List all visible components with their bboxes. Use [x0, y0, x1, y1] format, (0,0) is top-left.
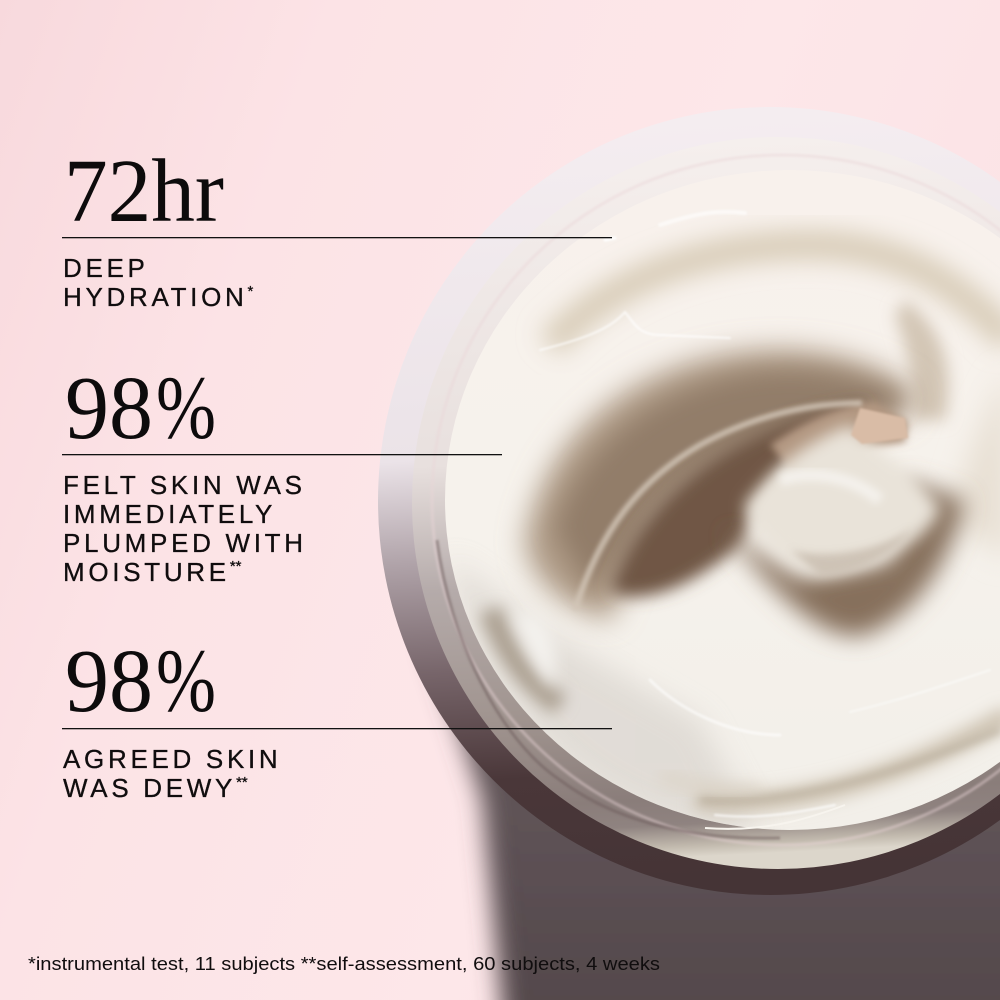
label: IMMEDIATELY	[63, 499, 276, 529]
lower brown pocket	[725, 480, 965, 636]
label: WAS DEWY	[63, 773, 236, 803]
cream edge highlight	[705, 805, 845, 829]
cream base	[445, 170, 1000, 830]
number: %	[156, 632, 216, 731]
lower beige folds	[695, 715, 1000, 802]
number	[65, 632, 216, 731]
label: MOISTURE	[63, 557, 230, 587]
dark core	[610, 402, 870, 596]
label: AGREED SKIN	[63, 744, 281, 774]
label: *	[248, 283, 254, 300]
cream peak	[745, 425, 940, 575]
label: **	[236, 774, 248, 791]
footnote: *instrumental test, 11 subjects **self-assessment, 60 subjects, 4 weeks	[28, 953, 660, 974]
left streak	[490, 610, 560, 705]
stat: 98% plumped	[62, 359, 502, 587]
label	[63, 744, 281, 803]
label	[63, 253, 254, 312]
number: 98	[65, 359, 153, 458]
number	[65, 359, 216, 458]
label: **	[230, 558, 242, 575]
stat: 98% dewy	[62, 632, 612, 803]
number: %	[156, 359, 216, 458]
divider	[62, 454, 502, 455]
upper band shadow	[550, 245, 1000, 345]
number: 72hr	[64, 142, 224, 241]
cast shadow	[430, 600, 1000, 1000]
highlights	[540, 210, 836, 818]
label: PLUMPED WITH	[63, 528, 307, 558]
number: 98	[65, 632, 153, 731]
peach inner	[851, 408, 908, 444]
peach hollow	[768, 400, 912, 466]
label: DEEP	[63, 253, 149, 283]
photo: cream jar	[378, 107, 1000, 895]
jar rim	[378, 107, 1000, 895]
label: HYDRATION	[63, 282, 248, 312]
label	[63, 470, 307, 587]
main brown swirl halo	[525, 349, 915, 620]
lip of cream	[575, 403, 862, 610]
lower-left shade	[456, 573, 752, 827]
right tan fold	[895, 300, 949, 420]
divider	[62, 237, 612, 238]
stat: 72hr	[62, 142, 612, 312]
label: FELT SKIN WAS	[63, 470, 306, 500]
divider	[62, 728, 612, 729]
cream swirls	[450, 212, 1000, 835]
jar glass wall	[412, 137, 1000, 869]
